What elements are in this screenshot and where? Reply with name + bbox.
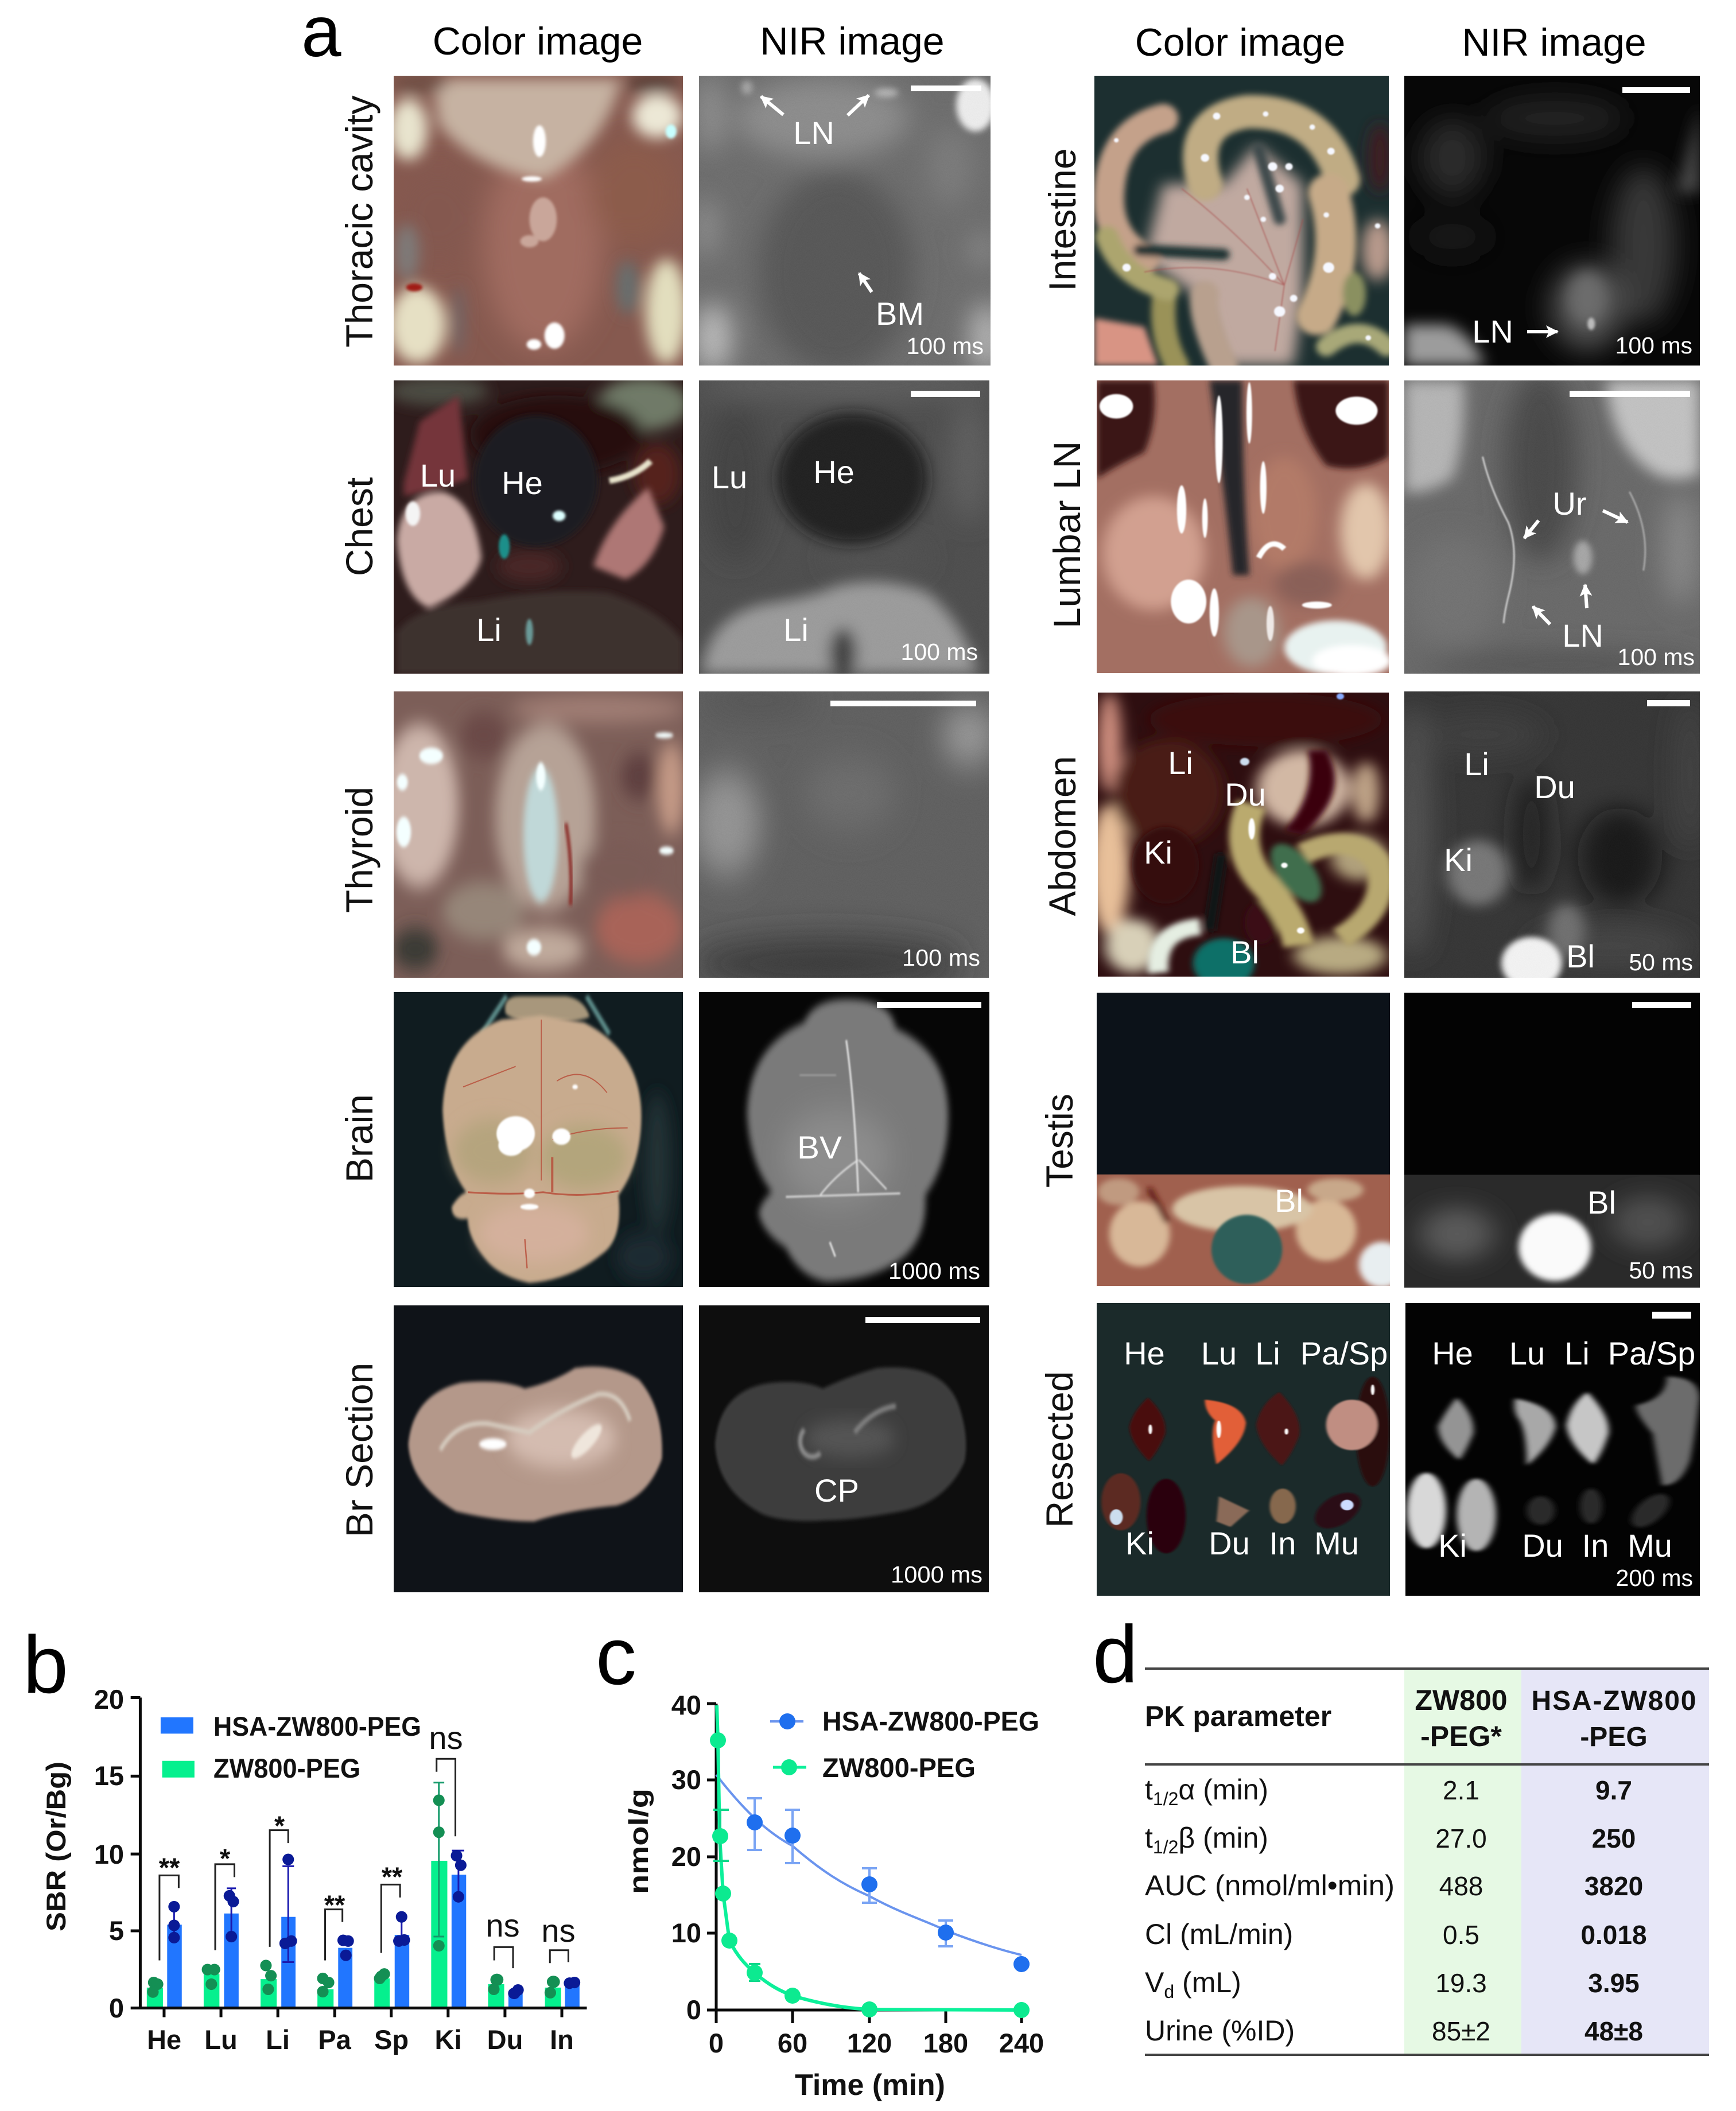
row label: intestine: Intestine	[1041, 148, 1083, 291]
panel: chest NIR	[699, 371, 1001, 680]
panel: resected NIR: Lu	[1509, 1335, 1545, 1371]
panel: resected NIR: Ki	[1438, 1527, 1467, 1564]
significance marks: *	[274, 1810, 285, 1841]
row: Urine	[1145, 2015, 1643, 2047]
table header: HSA-ZW800	[1531, 1686, 1696, 1716]
significance marks: ns	[541, 1912, 576, 1949]
panel: resected NIR	[1405, 1303, 1700, 1596]
row label: brain section: Br Section	[338, 1363, 380, 1537]
y axis labels	[671, 1690, 701, 2025]
panel: resected NIR: Mu	[1628, 1527, 1672, 1564]
line chart: concentration vs time	[623, 1690, 1044, 2102]
panel: thoracic cavity NIR: 100 ms	[907, 333, 984, 359]
row label: testis: Testis	[1038, 1094, 1081, 1188]
panel: brain section NIR: CP	[814, 1472, 859, 1509]
y axis labels: 0	[109, 1993, 124, 2023]
column heading: NIR image right: NIR image	[1462, 21, 1646, 64]
panel: thoracic cavity NIR: BM	[876, 296, 924, 332]
panel: brain section color	[394, 1305, 683, 1592]
panel: chest NIR: Li	[783, 612, 809, 648]
panel: abdomen NIR	[1394, 691, 1704, 989]
panel: brain color	[394, 992, 683, 1287]
panel: thoracic cavity color	[389, 73, 688, 366]
scale bar	[1622, 87, 1690, 93]
panel: testis color: Bl	[1275, 1183, 1303, 1219]
panel: intestine NIR: LN	[1472, 313, 1513, 349]
panel: lumbar LN color	[1097, 380, 1392, 677]
panel: thyroid color	[381, 691, 685, 978]
y axis labels: 20	[94, 1684, 124, 1715]
row: t1/2 beta: β (min)	[1178, 1822, 1268, 1854]
x axis labels: 180	[923, 2028, 968, 2058]
y axis labels: 40	[671, 1690, 701, 1720]
panel: resected color: Mu	[1314, 1525, 1359, 1561]
panel: abdomen NIR: Ki	[1444, 842, 1473, 878]
scale bar	[877, 1002, 981, 1008]
x axis labels: 0	[709, 2028, 724, 2058]
row: Vd	[1145, 1966, 1640, 2002]
scale bar	[1632, 1002, 1691, 1008]
panel: lumbar LN NIR	[1404, 369, 1704, 678]
panel: abdomen color: Li	[1168, 745, 1193, 781]
table header: ZW800	[1415, 1684, 1508, 1716]
panel: resected color: Li	[1255, 1335, 1280, 1371]
column heading: NIR image left: NIR image	[760, 20, 945, 63]
table: PK parameters	[1145, 1669, 1709, 2055]
panel: resected color	[1097, 1303, 1390, 1596]
row: Cl: Cl (mL/min)	[1145, 1918, 1293, 1950]
row: t1/2 beta	[1145, 1822, 1636, 1857]
scale bar	[1647, 700, 1690, 706]
row label: chest: Chest	[338, 477, 380, 576]
panel: abdomen NIR: 50 ms	[1629, 949, 1693, 975]
significance marks: *	[220, 1843, 231, 1873]
row: t1/2 alpha: 9.7	[1595, 1775, 1632, 1805]
panel: abdomen color	[1089, 693, 1389, 988]
row: Cl	[1145, 1918, 1647, 1950]
y axis labels: 10	[671, 1918, 701, 1948]
x axis title: Time (min)	[795, 2069, 945, 2102]
table header: -PEG*	[1420, 1720, 1502, 1752]
legend: ZW800-PEG	[213, 1753, 360, 1783]
x axis labels: 60	[778, 2028, 807, 2058]
row: AUC: 488	[1439, 1871, 1483, 1901]
x axis labels	[709, 2028, 1044, 2058]
x axis labels: Sp	[374, 2024, 409, 2055]
panel: chest NIR: He	[813, 454, 855, 490]
panel: thoracic cavity NIR: LN	[793, 115, 834, 151]
row: Cl: 0.018	[1580, 1920, 1647, 1950]
panel c label: c	[596, 1611, 636, 1702]
panel: chest color: Li	[476, 612, 502, 648]
table header: -PEG	[1580, 1722, 1648, 1752]
x axis labels: 120	[847, 2028, 892, 2058]
panel: chest color	[388, 376, 689, 674]
table header: PK parameter	[1145, 1700, 1331, 1732]
scale bar	[911, 85, 981, 91]
y axis labels: 0	[686, 1995, 701, 2025]
legend: HSA-ZW800-PEG	[213, 1711, 421, 1741]
panel: lumbar LN NIR: LN	[1562, 617, 1603, 654]
panel: resected color: Ki	[1125, 1525, 1154, 1561]
panel: abdomen color: Bl	[1230, 934, 1259, 970]
panel: abdomen NIR: Li	[1464, 746, 1489, 782]
row: Urine: Urine (%ID)	[1145, 2015, 1295, 2047]
row: Vd: V	[1145, 1966, 1164, 1999]
bar chart: SBR by organ	[41, 1684, 587, 2055]
row: Vd: (mL)	[1174, 1966, 1241, 1999]
scale bar	[911, 391, 980, 397]
row: AUC: 3820	[1584, 1871, 1643, 1901]
significance marks: **	[382, 1861, 403, 1892]
panel: thyroid NIR	[690, 686, 997, 989]
y axis labels: 20	[671, 1841, 701, 1872]
panel: resected NIR: 200 ms	[1616, 1565, 1693, 1591]
row: Vd: d	[1164, 1981, 1174, 2002]
panel: chest NIR: Lu	[712, 459, 747, 495]
significance marks: **	[324, 1890, 345, 1920]
row: t1/2 beta: 1/2	[1153, 1837, 1178, 1857]
row label: resected: Resected	[1038, 1371, 1081, 1527]
significance marks: **	[159, 1852, 180, 1883]
row label: thoracic cavity: Thoracic cavity	[338, 95, 380, 348]
panel: abdomen NIR: Bl	[1566, 938, 1595, 974]
panel: resected color: Du	[1209, 1525, 1250, 1561]
x axis labels: Pa	[318, 2024, 352, 2055]
x axis labels: Du	[487, 2024, 523, 2055]
x axis labels: 240	[999, 2028, 1044, 2058]
column heading: color image left: Color image	[433, 20, 643, 63]
y axis title: nmol/g	[623, 1789, 654, 1894]
row: t1/2 beta: t	[1145, 1822, 1153, 1854]
scale bar	[865, 1317, 980, 1323]
scale bar	[1570, 391, 1690, 397]
panel: brain section NIR	[699, 1305, 989, 1592]
row: Urine: 48±8	[1584, 2016, 1643, 2046]
legend	[770, 1706, 1039, 1783]
panel: resected NIR: Li	[1564, 1335, 1590, 1371]
panel b label: b	[23, 1619, 68, 1710]
panel: testis color	[1097, 993, 1405, 1288]
row: t1/2 alpha	[1145, 1774, 1632, 1809]
row label: thyroid: Thyroid	[338, 787, 380, 913]
panel d label: d	[1093, 1609, 1138, 1700]
significance marks: ns	[429, 1720, 463, 1756]
panel: thyroid NIR: 100 ms	[902, 944, 980, 971]
panel: intestine NIR: 100 ms	[1615, 332, 1692, 359]
x axis labels: Ki	[435, 2024, 461, 2055]
panel: intestine NIR	[1404, 76, 1700, 366]
panel: resected NIR: Pa/Sp	[1608, 1335, 1695, 1371]
row label: lumbar LN: Lumbar LN	[1046, 441, 1088, 628]
x axis labels: He	[147, 2024, 181, 2055]
panel: brain NIR	[699, 992, 989, 1287]
x axis labels	[147, 2024, 574, 2055]
y axis labels: 10	[94, 1839, 124, 1869]
panel: resected color: He	[1124, 1335, 1165, 1371]
row: t1/2 alpha: t	[1145, 1774, 1153, 1806]
panel: lumbar LN NIR: Ur	[1552, 485, 1587, 522]
panel: brain NIR: 1000 ms	[888, 1258, 980, 1284]
row: Cl: 0.5	[1443, 1920, 1479, 1950]
panel: resected NIR: Du	[1522, 1527, 1563, 1564]
panel: abdomen color: Ki	[1144, 834, 1172, 870]
row: t1/2 beta: 27.0	[1435, 1824, 1487, 1853]
y axis labels	[94, 1684, 124, 2023]
row: AUC: AUC (nmol/ml•min)	[1145, 1869, 1395, 1902]
panel: testis NIR: 50 ms	[1629, 1257, 1693, 1284]
panel: resected NIR: In	[1582, 1527, 1609, 1564]
significance marks: ns	[486, 1907, 520, 1943]
panel: intestine color	[1094, 76, 1394, 366]
x axis labels: Lu	[204, 2024, 238, 2055]
panel: thoracic cavity NIR	[694, 75, 1003, 373]
row: t1/2 beta: 250	[1592, 1824, 1636, 1853]
legend: HSA-ZW800-PEG	[822, 1706, 1039, 1736]
panel: chest color: He	[502, 465, 543, 501]
panel: resected color: Lu	[1201, 1335, 1237, 1371]
panel: brain section NIR: 1000 ms	[891, 1561, 982, 1588]
panel: resected color: Pa/Sp	[1300, 1335, 1388, 1371]
panel: brain NIR: BV	[797, 1129, 842, 1165]
row: Urine: 85±2	[1432, 2016, 1490, 2046]
panel: resected NIR: He	[1432, 1335, 1473, 1371]
table header	[1145, 1684, 1696, 1752]
scale bar	[830, 701, 976, 706]
row: t1/2 alpha: 2.1	[1443, 1775, 1479, 1805]
y axis labels: 30	[671, 1764, 701, 1795]
row label: brain: Brain	[338, 1094, 380, 1183]
panel: resected color: In	[1269, 1525, 1296, 1561]
row: Vd: 3.95	[1588, 1968, 1640, 1998]
panel: abdomen NIR: Du	[1534, 769, 1575, 805]
row label: abdomen: Abdomen	[1041, 756, 1083, 916]
y axis labels: 5	[109, 1915, 124, 1946]
legend: ZW800-PEG	[822, 1752, 976, 1783]
row: t1/2 alpha: α (min)	[1178, 1774, 1268, 1806]
scale bar	[1652, 1312, 1691, 1319]
significance marks	[159, 1720, 576, 1949]
panel: chest color: Lu	[420, 457, 456, 493]
x axis labels: In	[550, 2024, 574, 2055]
row: AUC	[1145, 1869, 1643, 1902]
panel: testis NIR: Bl	[1587, 1184, 1616, 1220]
panel: chest NIR: 100 ms	[901, 639, 978, 665]
x axis labels: Li	[266, 2024, 290, 2055]
y axis title: SBR (Or/Bg)	[41, 1762, 71, 1931]
panel: abdomen color: Du	[1225, 776, 1266, 812]
row: Vd: 19.3	[1435, 1968, 1487, 1998]
y axis labels: 15	[94, 1760, 124, 1791]
panel: testis NIR	[1404, 993, 1700, 1288]
row: t1/2 alpha: 1/2	[1153, 1789, 1178, 1809]
column heading: color image right: Color image	[1135, 21, 1345, 64]
legend	[213, 1711, 421, 1783]
panel: lumbar LN NIR: 100 ms	[1618, 644, 1695, 670]
